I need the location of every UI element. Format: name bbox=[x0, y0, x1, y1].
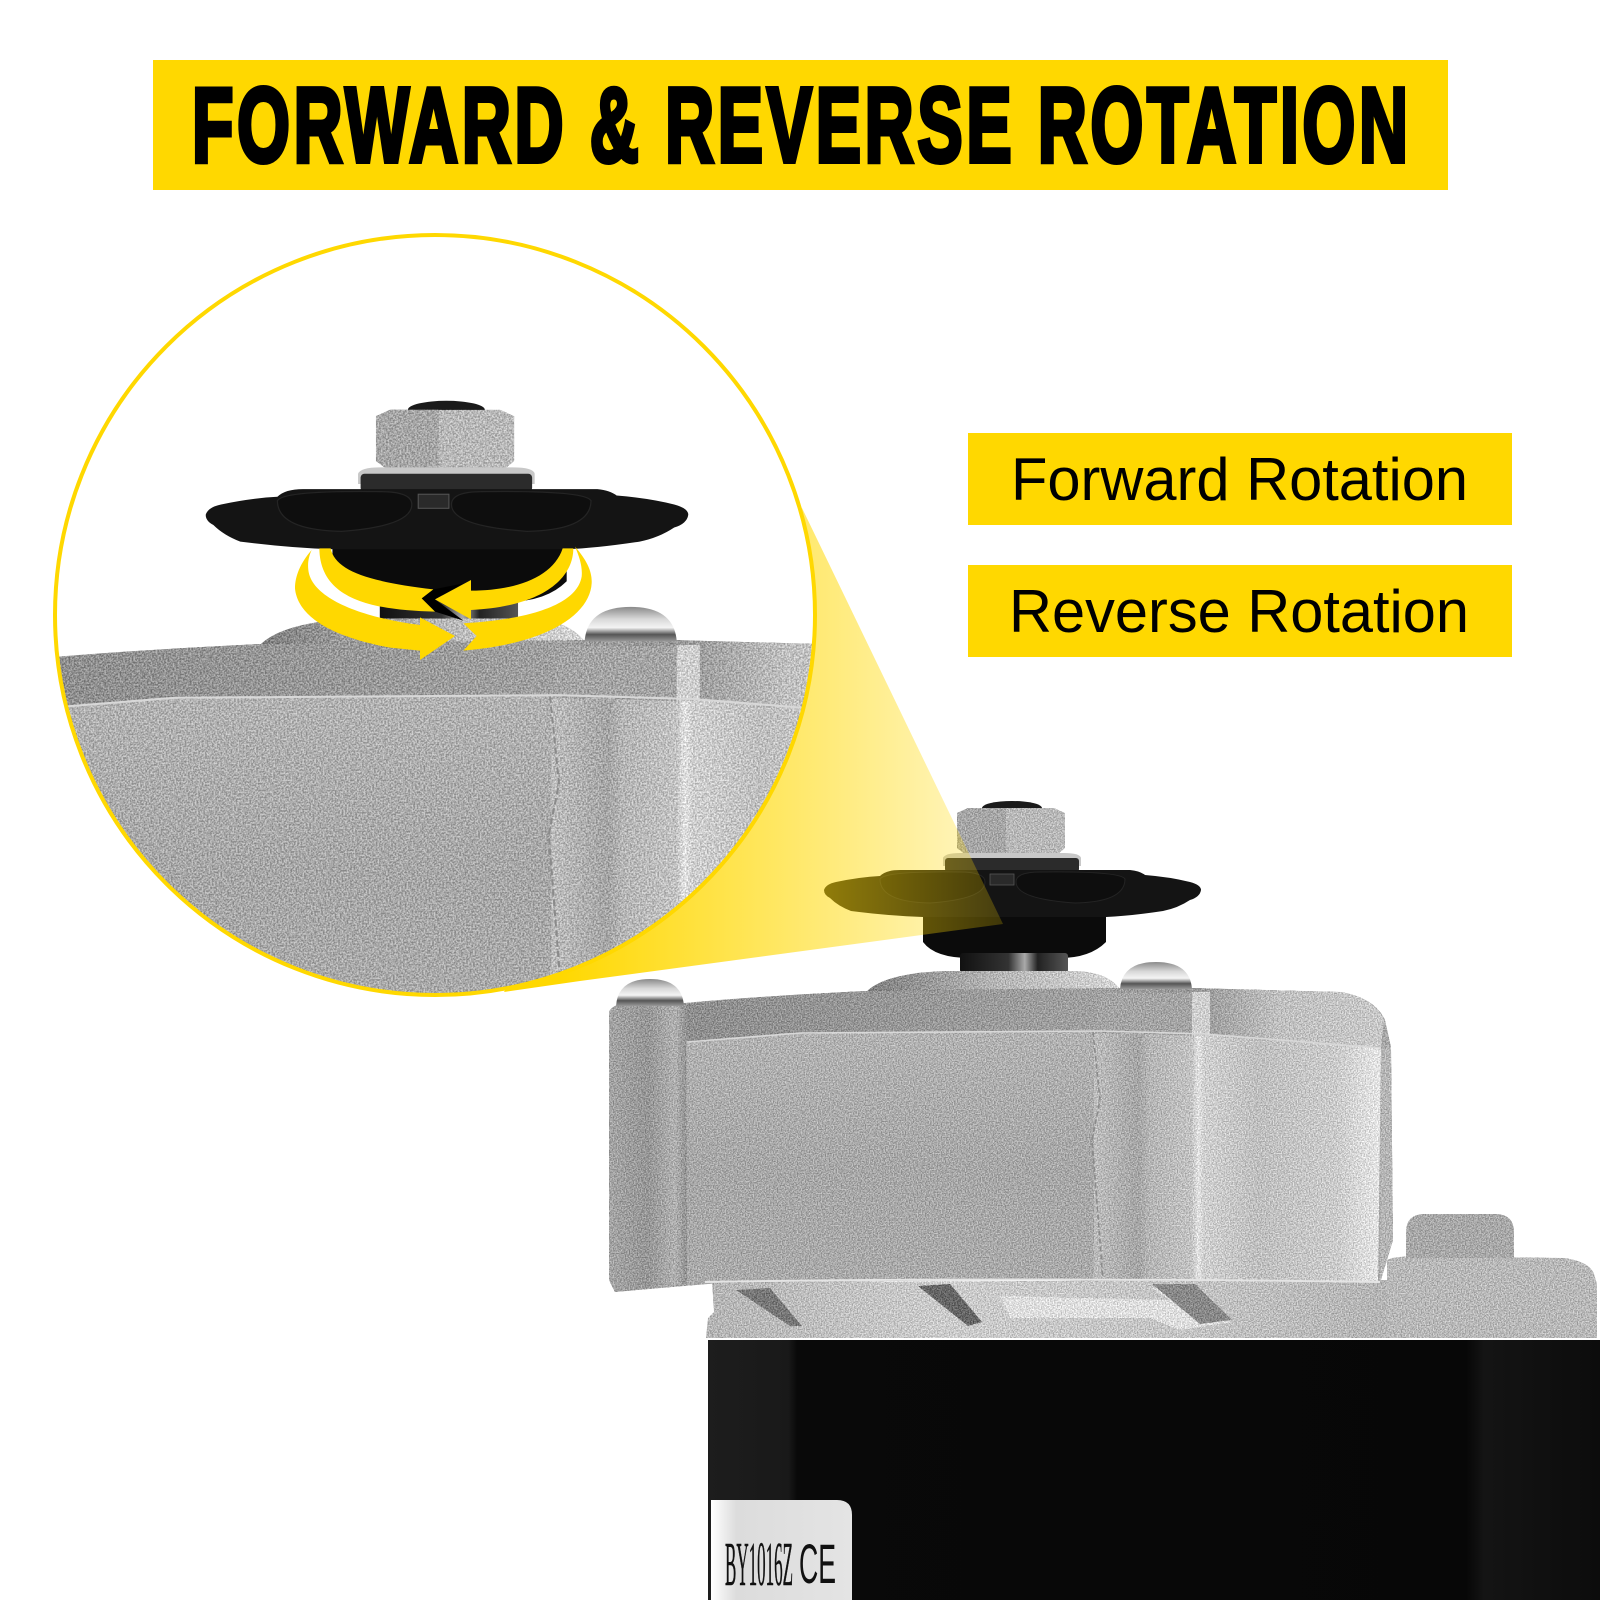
label: reverse rotation: Reverse Rotation bbox=[1009, 578, 1469, 645]
name plate sticker bbox=[711, 1500, 852, 1600]
label: forward rotation bbox=[968, 433, 1512, 525]
magnified circle view bbox=[53, 233, 817, 997]
name plate sticker: BY1016Z bbox=[725, 1531, 793, 1599]
photo: motor body bbox=[609, 801, 1600, 1600]
name plate sticker: CE bbox=[799, 1532, 836, 1595]
reverse arrow: left inner arc bbox=[319, 548, 435, 612]
black motor can bbox=[708, 1340, 1600, 1600]
zoom callout wedge bbox=[504, 508, 1003, 992]
forward arrow: left outer arc bbox=[295, 550, 455, 660]
forward arrow: right outer arc bbox=[463, 547, 592, 651]
label: reverse rotation bbox=[968, 565, 1512, 657]
reverse arrow: right inner arc bbox=[435, 548, 573, 619]
gearbox and sprocket bbox=[609, 801, 1597, 1338]
rotation arrows bbox=[295, 547, 592, 660]
label: forward rotation: Forward Rotation bbox=[1011, 446, 1468, 513]
title banner: FORWARD & REVERSE ROTATION bbox=[192, 65, 1408, 184]
